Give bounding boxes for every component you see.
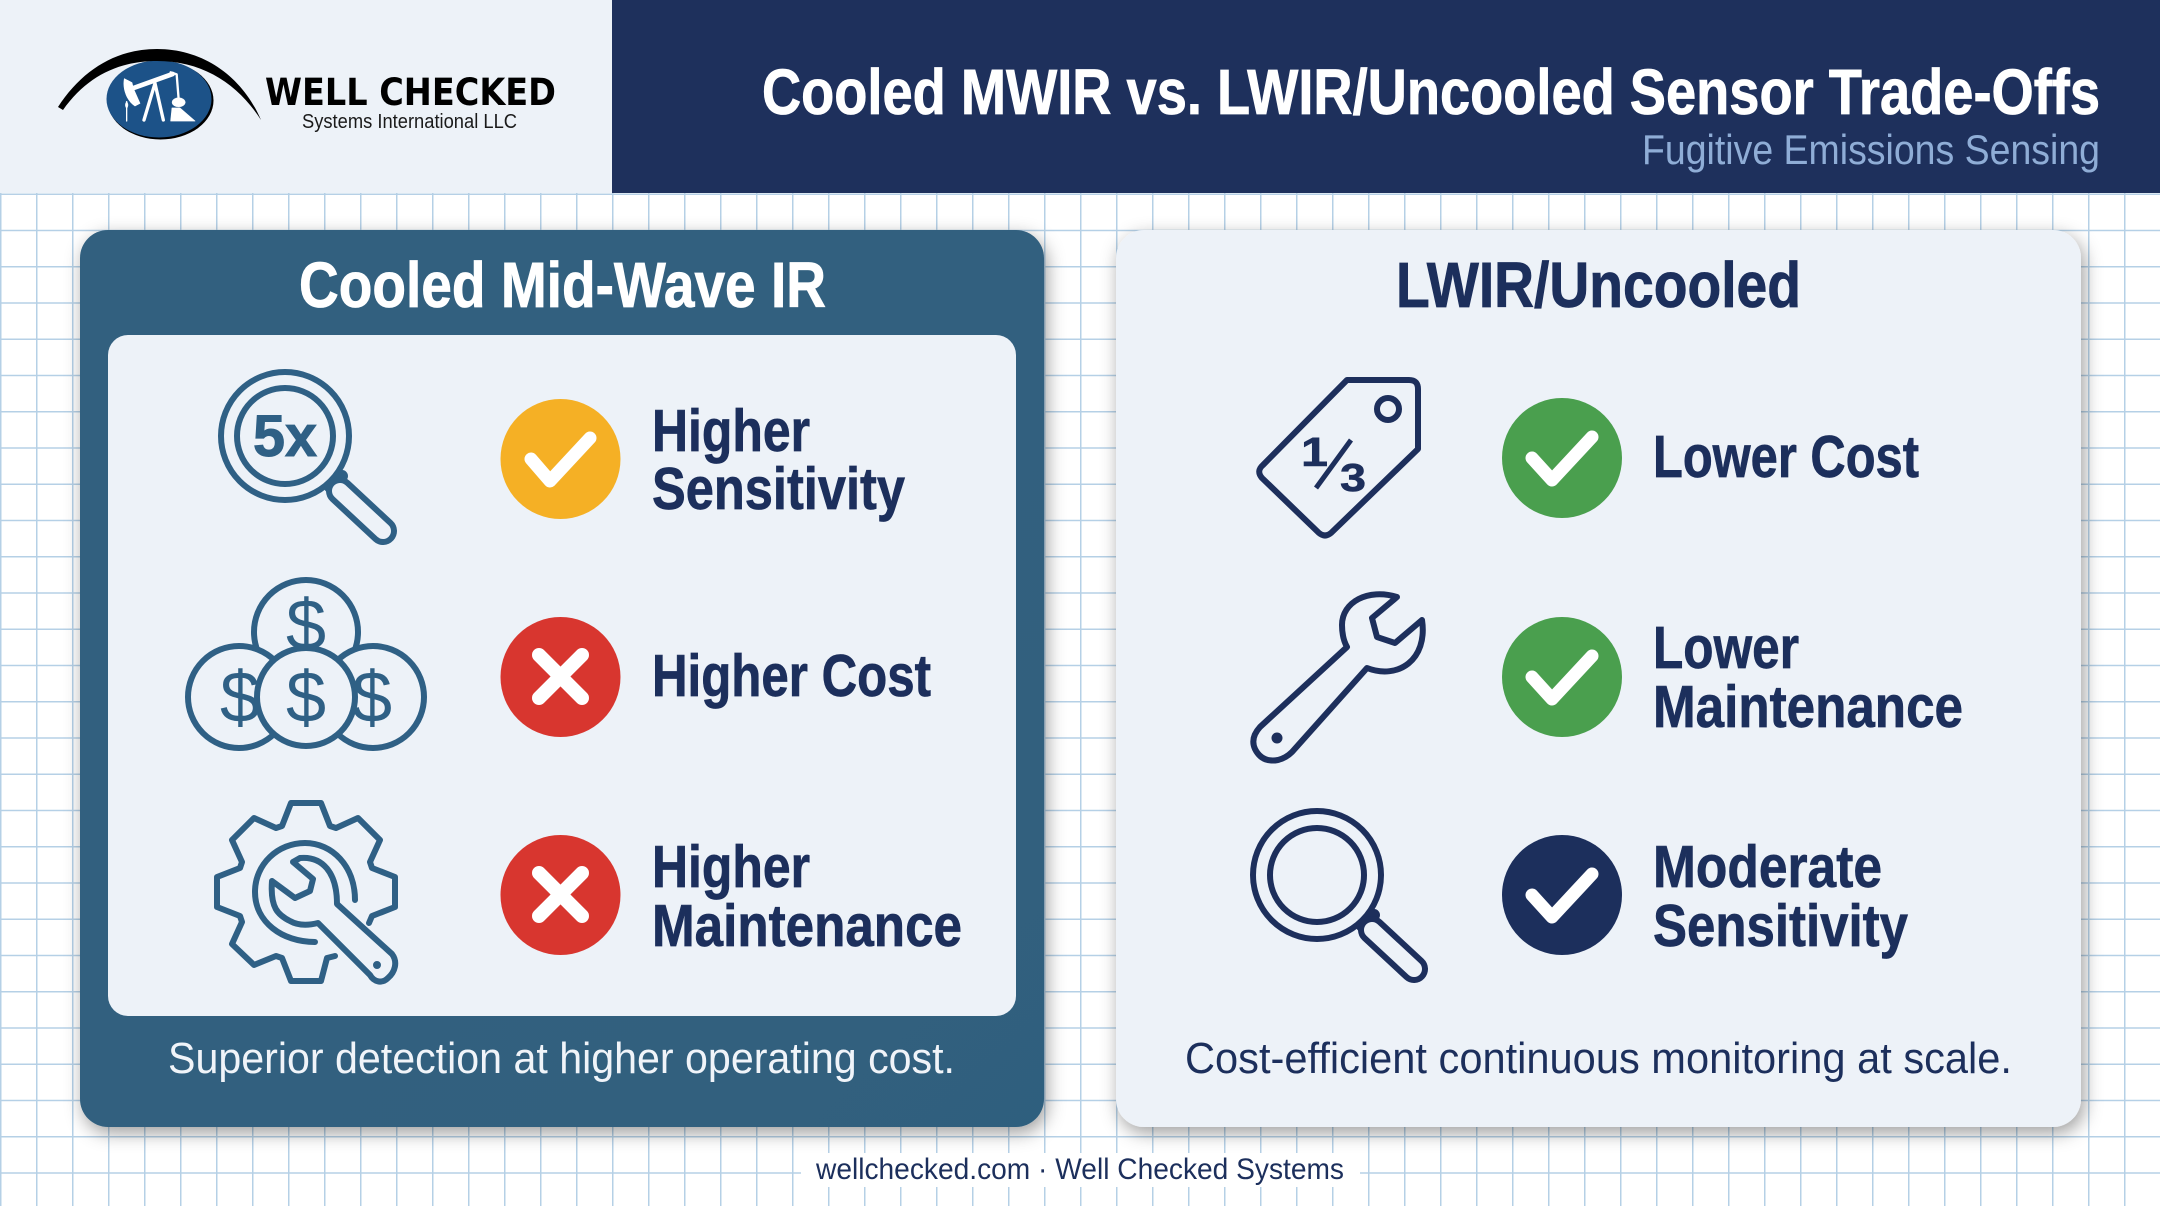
label: Higher Cost: Higher Cost bbox=[652, 643, 931, 709]
label: Lower Maintenance: Maintenance bbox=[1653, 674, 1963, 740]
label: Higher Maintenance: Higher bbox=[652, 834, 810, 900]
icon: magnifier bbox=[1253, 811, 1414, 969]
label: Higher Sensitivity: Sensitivity bbox=[652, 456, 905, 522]
logo: eye and pumpjack bbox=[58, 49, 261, 140]
heading: Cooled Mid-Wave IR: Cooled Mid-Wave IR bbox=[299, 249, 826, 321]
status: Higher Sensitivity check bbox=[500, 399, 620, 519]
icon: magnifier 5x: 5x bbox=[253, 404, 317, 469]
icon: wrench bbox=[1253, 594, 1423, 761]
panel: LWIR/Uncooled bbox=[1116, 230, 2081, 1127]
status: Higher Maintenance cross bbox=[500, 835, 620, 955]
icon: magnifier 5x bbox=[221, 372, 383, 531]
label: Higher Maintenance: Maintenance bbox=[652, 893, 962, 959]
icon: price tag one third: 1 bbox=[1301, 429, 1328, 475]
icon: coins: $ bbox=[352, 658, 392, 738]
header: logo area bbox=[0, 0, 612, 193]
icon: pumpjack bbox=[124, 72, 195, 121]
status: Lower Cost check bbox=[1502, 398, 1622, 518]
logo wordmark bbox=[265, 71, 556, 133]
icon: coins: $ bbox=[286, 586, 326, 666]
icon: gear with wrench bbox=[217, 803, 395, 982]
icon: coins: $ bbox=[286, 658, 326, 738]
status: Lower Maintenance check bbox=[1502, 617, 1622, 737]
icon: price tag one third: 3 bbox=[1340, 457, 1366, 500]
caption: cooled: Superior detection at higher operating cost. bbox=[168, 1034, 955, 1083]
label: Moderate Sensitivity bbox=[1653, 834, 1908, 959]
icon: coins bbox=[188, 580, 424, 748]
footer: wellchecked.com · Well Checked Systems bbox=[815, 1153, 1344, 1186]
icon: price tag one third bbox=[1259, 380, 1418, 536]
subtitle: Fugitive Emissions Sensing bbox=[1642, 126, 2100, 173]
caption: uncooled: Cost-efficient continuous monitoring at scale. bbox=[1185, 1034, 2012, 1083]
header: title banner bbox=[612, 0, 2160, 193]
status: Higher Cost cross bbox=[500, 617, 620, 737]
inner card bbox=[108, 335, 1016, 1016]
panel: Cooled Mid-Wave IR bbox=[80, 230, 1044, 1127]
icon: coins: $ bbox=[220, 658, 260, 738]
label: Lower Maintenance: Lower bbox=[1653, 615, 1799, 681]
logo wordmark: Systems International LLC bbox=[302, 111, 517, 133]
label: Higher Sensitivity bbox=[652, 398, 905, 522]
status: Moderate Sensitivity check bbox=[1502, 835, 1622, 955]
label: Higher Sensitivity: Higher bbox=[652, 398, 810, 464]
label: Moderate Sensitivity: Sensitivity bbox=[1653, 893, 1908, 959]
label: Lower Cost: Lower Cost bbox=[1653, 424, 1919, 490]
heading: LWIR/Uncooled: LWIR/Uncooled bbox=[1396, 249, 1801, 321]
label: Lower Maintenance bbox=[1653, 615, 1963, 740]
label: Moderate Sensitivity: Moderate bbox=[1653, 834, 1882, 900]
logo wordmark: WELL CHECKED bbox=[265, 71, 556, 114]
label: Higher Maintenance bbox=[652, 834, 962, 959]
